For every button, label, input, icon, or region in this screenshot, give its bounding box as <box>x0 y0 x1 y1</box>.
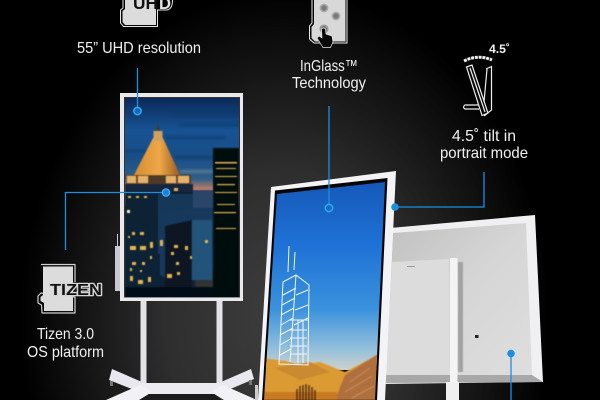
side module <box>115 234 120 291</box>
lower buildings <box>125 192 195 298</box>
label: tilt in portrait mode: 4.5˚ tilt in <box>452 128 516 145</box>
colonnade lights <box>127 176 189 183</box>
label: InGlass Technology: InGlass™ <box>300 58 358 75</box>
label: Tizen OS platform: OS platform <box>27 344 104 361</box>
label: Tizen OS platform <box>27 326 104 361</box>
callout: InGlass <box>325 106 333 212</box>
label: InGlass Technology <box>292 58 366 92</box>
label: 55 inch UHD resolution: 55” UHD resolution <box>77 40 201 57</box>
display: portrait on stand <box>106 93 258 400</box>
rear module <box>386 259 449 375</box>
distant skyline <box>193 190 213 208</box>
icon: tilt diagram <box>464 42 510 116</box>
callout: 55 inch UHD resolution <box>134 68 141 115</box>
dark tower <box>213 148 239 298</box>
golden roof <box>134 138 180 175</box>
label: Tizen OS platform: Tizen 3.0 <box>37 326 94 343</box>
icon: Tizen chip: TIZEN <box>50 282 102 299</box>
display: tilted front <box>255 171 396 400</box>
callout: Tizen OS <box>66 189 170 250</box>
cityscape photo <box>125 98 240 298</box>
label: tilt in portrait mode: portrait mode <box>440 145 528 162</box>
desert and city screen <box>264 182 385 400</box>
stand legs and base <box>106 300 258 400</box>
windows <box>127 162 237 284</box>
label: InGlass Technology: Technology <box>292 75 366 92</box>
icon: InGlass touch <box>310 0 347 48</box>
frame <box>120 93 243 301</box>
callout: 4.5 degree tilt <box>391 172 484 211</box>
icon: tilt diagram: 4.5˚ <box>489 42 510 56</box>
wireframe skyscraper <box>279 246 309 365</box>
label: tilt in portrait mode <box>440 128 528 162</box>
back display <box>380 215 543 400</box>
dunes <box>262 354 378 400</box>
icon: UHD chip <box>120 0 172 26</box>
stand pole <box>446 382 459 400</box>
callout: back display <box>507 350 515 400</box>
icon: Tizen chip <box>38 264 102 313</box>
